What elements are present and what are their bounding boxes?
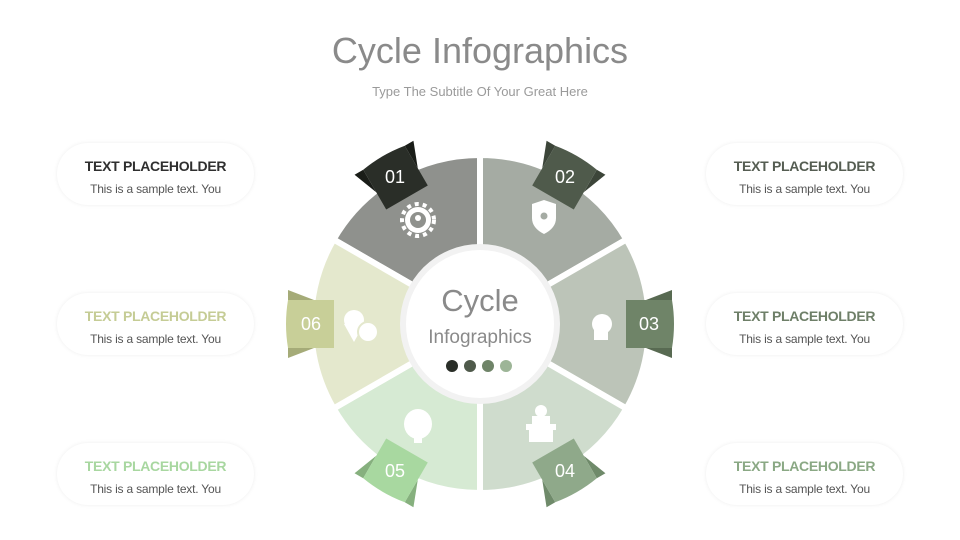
tabs (354, 139, 436, 215)
text box: 06: This is a sample text. You (90, 332, 221, 346)
tab numbers: 04 (555, 461, 575, 481)
text box: 02: TEXT PLACEHOLDER (734, 158, 875, 174)
text box: 03: This is a sample text. You (739, 332, 870, 346)
icons (344, 200, 612, 443)
tab numbers: 01 (385, 167, 405, 187)
center circle (400, 244, 560, 404)
text box: 05 (57, 443, 254, 505)
tab numbers: 02 (555, 167, 575, 187)
text box: 06 (57, 293, 254, 355)
text box: 01 (57, 143, 254, 205)
text box: 04: TEXT PLACEHOLDER (734, 458, 875, 474)
text box: 02: This is a sample text. You (739, 182, 870, 196)
tab numbers: 05 (385, 461, 405, 481)
text box: 01: This is a sample text. You (90, 182, 221, 196)
text box: 02 (706, 143, 903, 205)
title: Cycle Infographics (332, 30, 628, 71)
text box: 03: TEXT PLACEHOLDER (734, 308, 875, 324)
tab numbers (301, 167, 659, 481)
text box: 06: TEXT PLACEHOLDER (85, 308, 226, 324)
center circle: Cycle (441, 283, 519, 318)
tab numbers: 06 (301, 314, 321, 334)
center circle: Infographics (428, 327, 532, 348)
text box: 03 (706, 293, 903, 355)
text box: 04 (706, 443, 903, 505)
subtitle: Type The Subtitle Of Your Great Here (372, 84, 588, 99)
text box: 04: This is a sample text. You (739, 482, 870, 496)
tab numbers: 03 (639, 314, 659, 334)
text box: 05: This is a sample text. You (90, 482, 221, 496)
text box: 05: TEXT PLACEHOLDER (85, 458, 226, 474)
text box: 01: TEXT PLACEHOLDER (85, 158, 226, 174)
segments (311, 155, 649, 493)
